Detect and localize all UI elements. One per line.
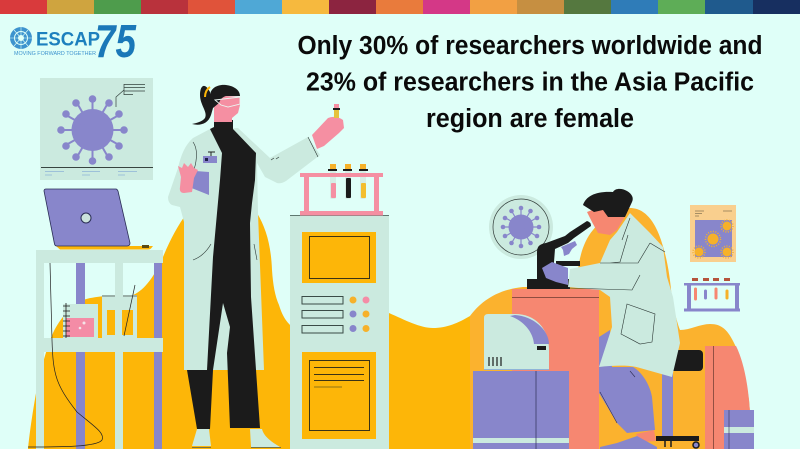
orange background blob [470, 208, 753, 449]
laptop [44, 189, 153, 250]
virus art poster [690, 205, 736, 262]
lab machine [484, 314, 549, 370]
cable [28, 263, 103, 447]
face [214, 96, 240, 122]
control dots [350, 296, 370, 332]
title: Only 30% of researchers worldwide and [298, 32, 762, 60]
salmon lab desk [512, 289, 599, 449]
microscope [527, 221, 591, 289]
yellow background blob [28, 213, 490, 449]
standing scientist [168, 85, 344, 448]
control row buttons [302, 296, 343, 333]
icon: virus [57, 95, 128, 165]
purple box [724, 410, 754, 449]
head [192, 85, 240, 125]
SDG colour strip [0, 0, 800, 14]
clipboard [182, 170, 209, 195]
hair [192, 85, 240, 125]
left hand [178, 163, 198, 193]
lower panel [302, 352, 376, 439]
goggles [215, 97, 240, 107]
title [298, 32, 762, 133]
foot [636, 430, 656, 442]
coat details [193, 137, 318, 260]
right hand [312, 117, 344, 149]
icon: UN emblem [10, 27, 32, 49]
held test tube [333, 104, 340, 118]
face [587, 205, 627, 235]
lab tower cabinet [290, 216, 389, 449]
purple cabinet [473, 371, 569, 449]
logo 75: 75 [95, 15, 137, 67]
seated lab coat [568, 213, 680, 377]
title: region are female [426, 105, 634, 133]
logo: ESCAP 75 [10, 15, 137, 67]
badge [203, 152, 217, 163]
small test tube rack [684, 278, 740, 312]
shoes [192, 429, 281, 448]
stool [656, 350, 703, 448]
salmon right cabinet [705, 346, 753, 449]
seated scientist [542, 189, 680, 449]
lab coat [168, 128, 320, 370]
trousers [599, 330, 655, 433]
logo wordmark: ESCAP [36, 30, 100, 50]
round virus badge [489, 195, 553, 259]
upper panel [302, 232, 376, 283]
logo tagline: MOVING FORWARD TOGETHER [14, 51, 96, 57]
poster: virus diagram [40, 78, 153, 180]
shelf unit [36, 250, 163, 449]
callout lines [116, 84, 145, 107]
test tube rack [300, 164, 383, 216]
glove [542, 262, 568, 285]
beaker: yellow liquid [102, 285, 137, 338]
title: 23% of researchers in the Asia Pacific [306, 68, 754, 96]
black outfit [187, 120, 260, 429]
hair [583, 189, 633, 217]
beaker: pink liquid [63, 303, 98, 338]
